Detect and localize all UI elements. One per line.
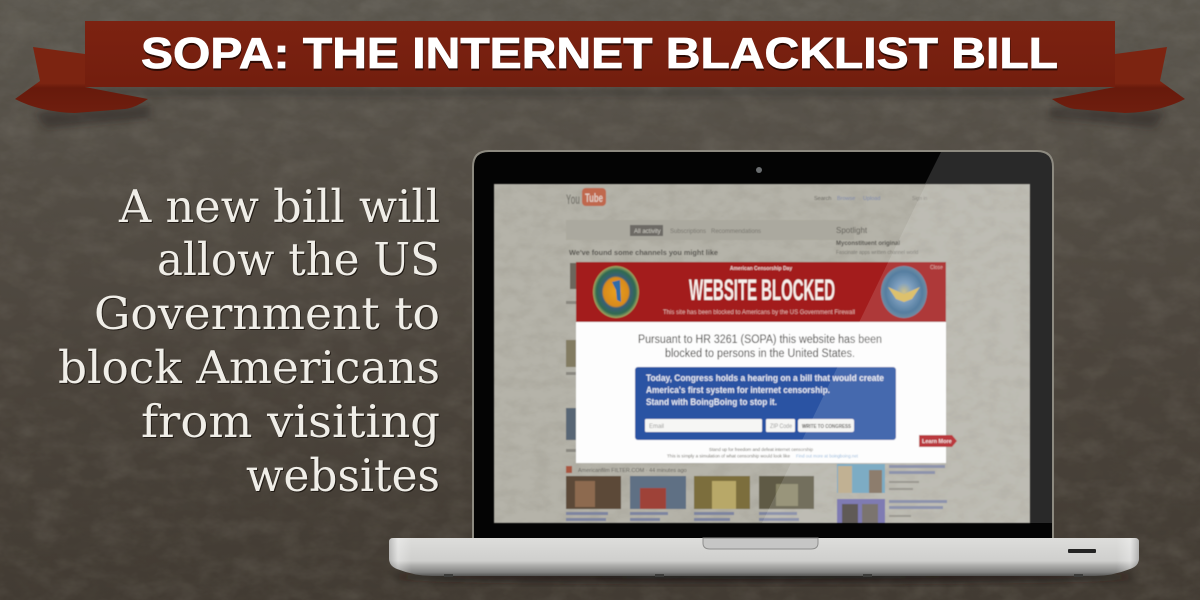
laptop lid [473, 151, 1053, 540]
blue call-to-action box: Stand with BoingBoing to stop it. [646, 397, 777, 407]
blue call-to-action box: Today, Congress holds a hearing on a bill that would create [646, 373, 884, 383]
left ribbon tail [15, 47, 148, 113]
popup message [638, 334, 882, 360]
tab bar: Recommendations [711, 229, 761, 235]
tab bar [566, 220, 918, 256]
laptop base [389, 538, 1139, 582]
lid glare on bezel [925, 152, 1052, 523]
rubber feet [444, 574, 1083, 577]
popup message: Pursuant to HR 3261 (SOPA) this website has been [638, 334, 882, 346]
popup red header: This site has been blocked to Americans by the US Government Firewall [663, 310, 855, 316]
popup footnote: Find out more at boingboing.net [796, 454, 859, 458]
popup red header: WEBSITE BLOCKED [689, 274, 835, 307]
tab bar: All activity [634, 229, 661, 235]
laptop screen [494, 184, 1030, 523]
lid notch [703, 538, 818, 549]
learn more tag: Learn More [922, 439, 952, 445]
side thumbnails [566, 263, 577, 452]
left description text: A new bill will [118, 180, 440, 233]
screen glare [762, 184, 1030, 523]
ribbon body [85, 21, 1115, 87]
blue call-to-action box: ZIP Code [770, 424, 793, 430]
title shadow: SOPA: THE INTERNET BLACKLIST BILL [142, 32, 1058, 80]
blue call-to-action box: WRITE TO CONGRESS [802, 424, 851, 430]
blue call-to-action box: America's first system for internet censorship. [646, 385, 830, 395]
popup footnote: Stand up for freedom and defeat internet censorship [709, 447, 814, 452]
video site header [566, 188, 928, 207]
learn more tag [919, 435, 957, 447]
video site header: Browse [837, 196, 855, 202]
webcam [756, 167, 762, 173]
laptop illustration [389, 151, 1139, 582]
right ribbon tail [1052, 47, 1185, 113]
blocked-site popup [576, 262, 946, 463]
popup red header: Close [930, 265, 943, 271]
left description text: Government to [94, 287, 440, 340]
title ribbon banner [15, 21, 1185, 128]
video site header: Upload [863, 196, 880, 202]
submit button [798, 419, 854, 432]
video site header: Sign in [912, 196, 928, 202]
video site header: Tube [585, 191, 603, 205]
video site header: Search [814, 196, 831, 202]
ribbon shadow [35, 90, 1165, 128]
tab bar: Fascinate apps written channel world [836, 250, 918, 256]
blue call-to-action box [635, 367, 896, 440]
speaker slot [1068, 549, 1096, 553]
tab bar: Spotlight [836, 226, 868, 235]
left description text: from visiting [141, 395, 440, 448]
popup red header [576, 262, 946, 322]
left description text: websites [246, 449, 440, 502]
popup footnote: This is simply a simulation of what censorship would look like [667, 454, 790, 458]
zip field [766, 419, 795, 432]
left description text: allow the US [157, 233, 440, 286]
bottom video row [566, 466, 814, 521]
title: SOPA: THE INTERNET BLACKLIST BILL [141, 30, 1058, 78]
popup red header: American Censorship Day [730, 266, 792, 272]
channels heading: We've found some channels you might like [569, 248, 718, 257]
right video column [837, 464, 947, 523]
right seal [881, 266, 927, 318]
email field [645, 419, 762, 432]
popup message: blocked to persons in the United States. [665, 348, 855, 360]
tab bar: Myconstituent original [836, 241, 900, 247]
left seal [593, 266, 639, 318]
left description text [58, 180, 440, 502]
left description text: block Americans [58, 341, 440, 394]
tab bar: Subscriptions [670, 229, 706, 235]
bottom video row: Americanfilm FILTER.COM · 44 minutes ago [578, 468, 687, 474]
blue call-to-action box: Email [649, 424, 664, 430]
popup footnote [667, 447, 859, 458]
video site header: You [566, 191, 580, 207]
